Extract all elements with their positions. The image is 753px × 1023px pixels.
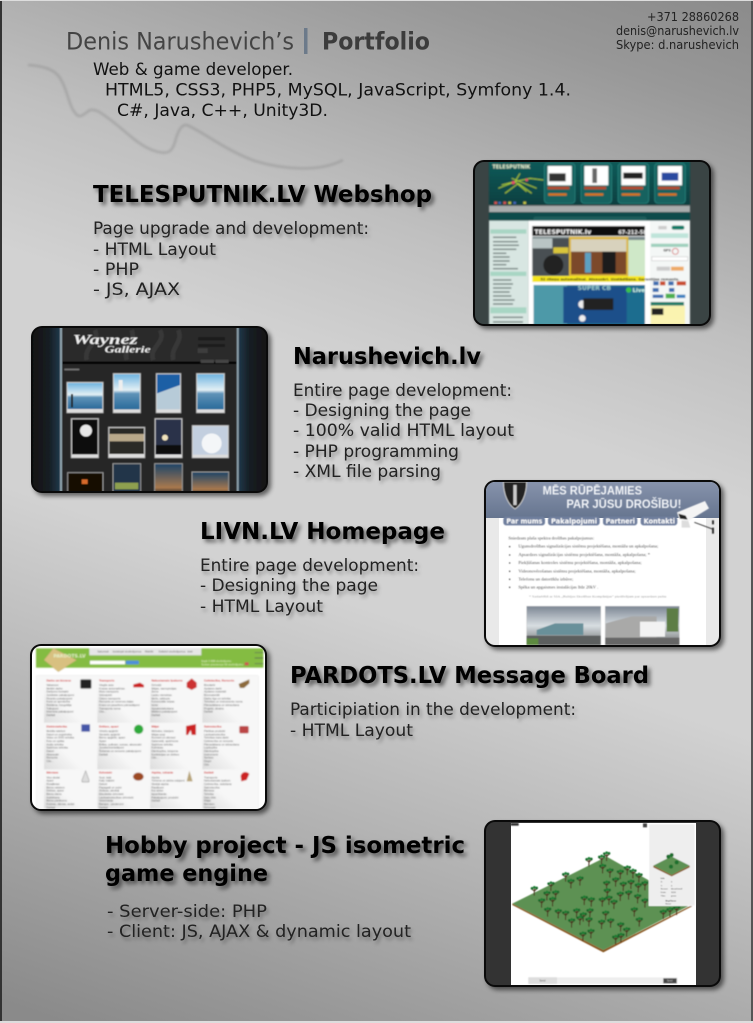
screenshot: Pardots message board: Visu skolai	[46, 775, 60, 779]
game info panel: Tiles:	[661, 895, 666, 897]
game info panel: Y:	[661, 885, 663, 887]
game info panel: 0	[671, 885, 673, 887]
game info panel: Reset	[665, 903, 671, 906]
screenshot: Telesputnik webshop: 67-212-583	[618, 230, 651, 236]
screenshot: Pardots message board: Elektrotehnika	[46, 724, 67, 728]
screenshot: Pardots message board: Apsaimniekošana	[151, 706, 174, 710]
screenshot: Pardots message board: Drēbes, apavi	[46, 789, 64, 793]
screenshot: Pardots message board: Brilles, pulkstei, somas, aksesuāri	[99, 742, 142, 746]
screenshot: Pardots message board	[30, 644, 270, 814]
trees	[531, 851, 680, 944]
screenshot: Pardots message board: Rozsieti un dārzeņi	[151, 736, 176, 740]
game info panel: Screen:	[661, 888, 668, 891]
screenshot: Pardots message board: Dzīvnieki	[204, 805, 216, 809]
screenshot: Pardots message board: Cits...	[151, 756, 159, 760]
icon: security camera	[677, 501, 714, 534]
intro text: Web & game developer.	[93, 60, 293, 80]
page title	[66, 28, 430, 56]
screenshot: Pardots message board: Rotaļlietas	[46, 782, 60, 786]
screenshot: Pardots message board: Finanšu pakalpojumi	[46, 696, 73, 700]
screenshot: Pardots message board: Dārzkopība	[204, 749, 219, 753]
screenshot: Pardots message board: Tehnikas un instrumentu noma	[204, 700, 243, 704]
screenshot: Pardots message board: Juridiskie pakalpojumi	[46, 693, 74, 697]
screenshot: Pardots message board: Mākleru pakalpojumi	[151, 710, 178, 714]
game info panel: grass	[671, 894, 676, 897]
intro text	[93, 60, 571, 121]
screenshot: Pardots message board: Šūšanas un remontu pakalpojumi	[99, 748, 141, 753]
screenshot: Pardots message board: Dažādi	[99, 752, 108, 756]
screenshot: Pardots message board: Mēbeles, interjers	[151, 729, 174, 733]
screenshot: Pardots message board: Šodien pievienoja 58 sludinājumu	[201, 661, 244, 666]
contact details: +371 28860268	[647, 9, 739, 24]
screenshot: Pardots message board: Transporta noma	[99, 706, 121, 710]
game info panel: X:	[661, 882, 663, 884]
screenshot: Pardots message board: Kaķi, kaķēni	[99, 779, 115, 783]
screenshot: Pardots message board: Sieviešu apģērbi	[99, 731, 120, 736]
decorative swoosh	[28, 65, 343, 168]
screenshot: Pardots message board: Kur aiziet	[151, 789, 163, 793]
screenshot: Pardots message board: Mājas, savrupmājas	[151, 686, 177, 690]
project text: Telesputnik: Page upgrade and development:	[93, 219, 369, 239]
game info panel: Info	[661, 878, 665, 880]
screenshot: Livn homepage: Telefonu un datortīklu izbūve;	[518, 577, 573, 581]
contact details	[616, 9, 740, 52]
screenshot: Pardots message board: Projekti, dizains	[204, 706, 224, 710]
screenshot: Waynez Gallerie: Gallerie	[105, 346, 151, 356]
screenshot: Pardots message board: Kravas automašīnas	[99, 686, 125, 690]
project text: Narushevich: Entire page development:	[293, 381, 512, 401]
project text: Narushevich: - Designing the page	[293, 401, 471, 421]
screenshot: Pardots message board: Tehnika	[204, 792, 214, 796]
screenshot: Pardots message board: Bērnu apģērbi, apavi	[99, 735, 125, 740]
screenshot: Pardots message board: Celtniecība, radošana	[204, 782, 232, 786]
game info panel: 1024	[671, 892, 677, 894]
screenshot: Pardots message board: Pakalpojumi, produkti	[151, 795, 179, 799]
screenshot: Pardots message board: Barojos - piederumi	[99, 802, 124, 806]
screenshot: Pardots message board: Sakumsā	[97, 650, 109, 654]
screenshot: Pardots message board: Kursi un apmācība	[46, 700, 70, 704]
screenshot: Pardots message board: Vietējā atpūta	[151, 782, 169, 786]
screenshot: Pardots message board: Darbs un biznese	[46, 678, 71, 682]
bottom command bar: Send	[667, 981, 673, 983]
screenshot: Pardots message board: Nekustamais īpašum	[204, 779, 231, 783]
screenshot: Pardots message board: Dažādi	[204, 710, 213, 714]
screenshot: Pardots message board: Tūrisma un atūtra ceļojumi	[151, 779, 185, 783]
screenshot: Pardots message board: Dārzkopība, lolojuma	[151, 749, 178, 753]
game info panel: 0	[671, 882, 673, 884]
screenshot: Pardots message board: Tehnikas kara darbi	[204, 736, 229, 740]
screenshot: Pardots message board: Konfekcijas un drēbes	[151, 752, 180, 756]
screenshot: Pardots message board: Lopkopība	[204, 746, 218, 750]
project text: Narushevich: - 100% valid HTML layout	[293, 421, 514, 441]
screenshot: Pardots message board: Degvi	[204, 759, 212, 763]
screenshot: Pardots message board: Auklēšana	[46, 795, 60, 799]
intro text: HTML5, CSS3, PHP5, MySQL, JavaScript, Symfony 1.4.	[105, 80, 571, 100]
screenshot: Pardots message board: Meklēt	[145, 650, 153, 654]
project text: hobby engine: - Client: JS, AJAX & dynamic layout	[107, 922, 411, 942]
screenshot: Pardots message board: Lauksaimniecības dzīvnieki	[99, 795, 134, 799]
screenshot: Pardots message board: Gaismekļi, apdzīvone	[151, 739, 179, 743]
screenshot: Pardots message board: Celtniecība, Remonts	[204, 678, 235, 682]
screenshot: Pardots message board: Datori un orgtehnika	[46, 732, 72, 736]
screenshot: Telesputnik webshop: 52 riteņu automašīnai. Atsauzāri. Uzstādīšana. Garantijas remonts.	[540, 278, 680, 282]
screenshot: Pardots message board: Atpūta	[151, 775, 160, 779]
project text: Telesputnik	[93, 182, 432, 300]
screenshot: Livn homepage: Kontakti	[644, 517, 675, 525]
project text: hobby engine: - Server-side: PHP	[107, 902, 267, 922]
screenshot: Pardots message board: Dažādi	[46, 805, 56, 809]
project text: Livn: Entire page development:	[200, 556, 419, 576]
intro text: C#, Java, C++, Unity3D.	[117, 101, 328, 121]
screenshot: Pardots message board: Darbs līgu un tehnika	[204, 696, 231, 700]
screenshot: Pardots message board: Izvietojet sludinājumus	[113, 650, 142, 654]
game info panel: Map/Game	[665, 900, 677, 902]
screenshot: Pardots message board: Sadzīves tehnika	[46, 746, 68, 750]
screenshot: Pardots message board: Dažādi	[99, 805, 108, 809]
page title: Portfolio	[322, 28, 430, 56]
screenshot: Pardots message board: Kravu un pasažieru pārvadājumi	[99, 703, 140, 707]
screenshot: Pardots message board: Cits	[204, 762, 209, 766]
screenshot: Pardots message board: Dažādi	[46, 713, 56, 717]
screenshot: Pardots message board: Biznesa	[204, 789, 214, 793]
game info panel	[649, 824, 695, 906]
project text: hobby engine: Hobby project - JS isometric	[105, 833, 465, 859]
screenshot: Pardots message board: Reklāma, fotogrāfija	[46, 703, 72, 707]
screenshot: Telesputnik webshop: TELESPUTNIK.lv	[534, 229, 592, 236]
screenshot: Livn homepage: Videonovērošanas sistēmu projektēšana, montāža, apkalpošana;	[518, 569, 636, 574]
screenshot: Pardots message board: Aksesuāri	[46, 752, 59, 756]
isometric ground	[512, 857, 693, 952]
screenshot: Pardots message board: Mobilie telefoni	[46, 729, 66, 733]
screenshot: Pardots message board: Lauku viensētas	[151, 693, 172, 697]
screenshot: Livn homepage: * Sadarbībā ar SIA „Baltijas Drošības Kompānijas” piedāvājam par apsardzes pultu	[529, 595, 667, 600]
screenshot: Pardots message board: Datori	[46, 749, 54, 753]
screenshot: Pardots message board: Iepazīšanās	[151, 792, 167, 796]
screenshot: Pardots message board: Mežs, sēklopis	[151, 696, 170, 700]
screenshot: Pardots message board: Pārvadāšana un iekraušana	[204, 703, 240, 707]
project text: Telesputnik: - HTML Layout	[93, 240, 216, 260]
screenshot: Waynez Gallerie	[31, 326, 271, 496]
screenshot: Livn homepage: Apsardzes signalizācijas sistēmu projektēšana, montāža, apkalpošana; *	[518, 553, 650, 558]
screenshot: Pardots message board: Datu tīkls	[204, 795, 216, 799]
screenshot: Pardots message board: Vieglie auto	[99, 683, 114, 687]
screenshot: Pardots message board: Mājai	[204, 799, 211, 803]
screenshot: Pardots message board: Foto un optika	[46, 739, 65, 743]
screenshot: Pardots message board: Mājai	[151, 724, 159, 728]
project text: Narushevich	[293, 344, 514, 482]
project text: Telesputnik: TELESPUTNIK.LV Webshop	[93, 182, 432, 208]
screenshot: Pardots message board: Būvmateriāli	[204, 693, 220, 697]
screenshot: Livn homepage: Pakalpojumi	[551, 517, 597, 525]
screenshot: Pardots message board: Zeme	[151, 690, 159, 694]
screenshot: Livn homepage: Ugunsdrošības signalizācijas sistēmu projektēšana, montāža un apkalpošana;	[518, 545, 658, 550]
game info panel: Units:	[661, 891, 667, 894]
screenshot: Pardots message board: Instrumenti	[204, 752, 218, 756]
screenshot: Pardots message board: Dzēstot sludinājumus	[159, 650, 186, 654]
screenshot: Pardots message board: Drēbes, apavi	[99, 724, 119, 728]
screenshot: Pardots message board: Remonts un rezerves daļas	[99, 700, 134, 704]
screenshot: Pardots message board: Saimniecība	[204, 724, 222, 728]
screenshot: Pardots message board: Pasākumi	[151, 785, 164, 789]
screenshot: Pardots message board: Dzīvokļi	[151, 683, 162, 687]
screenshot: Pardots message board: Pārtikas produkti	[204, 729, 225, 733]
screenshot: Pardots message board: Darījumu kontakti	[46, 690, 69, 694]
screenshot: Pardots message board: Būvdarbi	[204, 683, 216, 687]
screenshot: Telesputnik webshop: GPS	[663, 249, 672, 253]
screenshot: Pardots message board: Serises	[204, 756, 214, 760]
screenshot: Pardots message board: Saimniecība	[204, 785, 220, 789]
screenshot: Pardots message board: Komerciālie telpas	[151, 700, 175, 704]
screenshot: Telesputnik webshop: Live	[633, 288, 645, 294]
screenshot: Pardots message board: Apavi	[99, 739, 106, 743]
screenshot: Pardots message board: Bērnu dārzs	[46, 792, 62, 796]
screenshot: Pardots message board: Vīriešu apģērbi	[99, 728, 118, 733]
screenshot: Pardots message board: Dažādi	[151, 799, 161, 803]
screenshot: Livn homepage	[484, 480, 724, 650]
project text: Livn: - HTML Layout	[200, 597, 323, 617]
screenshot: Telesputnik webshop	[473, 160, 714, 329]
screenshot: Livn homepage: Piekļūšanas kontroles sistēmu projektēšana, montāža, apkalpošana;	[518, 561, 642, 566]
screenshot: Pardots message board: Juvelierizstrādājumi	[99, 746, 124, 750]
screenshot: Pardots message board: Zivtiņas, akvāriji	[99, 789, 119, 793]
game info panel: tileset/small	[671, 888, 683, 891]
screenshot: Pardots message board: Tulkojumi	[46, 706, 59, 710]
project text: hobby engine	[105, 833, 465, 942]
project text: Pardots	[290, 663, 649, 741]
screenshot: Pardots message board: Nekustamais īpašums	[151, 678, 183, 682]
screenshot: Pardots message board: Ūdens transports	[99, 695, 121, 700]
screenshot: Livn homepage: PAR JŪSU DROŠĪBU!	[566, 496, 681, 511]
page title: Denis Narushevich’s	[66, 28, 294, 56]
screenshot: Pardots message board: Transports	[204, 775, 218, 779]
screenshot: isometric game engine	[484, 820, 724, 990]
screenshot: Pardots message board: Vakances	[46, 683, 59, 687]
screenshot: Pardots message board: Cits...	[46, 759, 54, 763]
project text: Pardots: Participiation in the development:	[290, 700, 576, 720]
screenshot: Pardots message board: Dzīvnieki	[99, 771, 112, 775]
project text: Livn	[200, 519, 445, 617]
screenshot: Pardots message board: Eksotiskie dzīvnieki	[99, 792, 124, 796]
project text: Narushevich: Narushevich.lv	[293, 344, 481, 370]
screenshot: Pardots message board: Transports	[99, 678, 115, 682]
screenshot: Pardots message board: Suņi, kaķi	[99, 775, 112, 779]
screenshot: Pardots message board: Atpūta, izklaide	[151, 771, 174, 775]
screenshot: Livn homepage: Partneri	[606, 517, 635, 525]
screenshot: Pardots message board: Bērnu ratiņiem	[46, 785, 65, 789]
project text: Pardots: PARDOTS.LV Message Board	[290, 663, 649, 689]
screenshot: Pardots message board: Futūras, dārzas, autiņi	[46, 802, 75, 806]
screenshot: Pardots message board: Mājas auqi	[151, 732, 165, 736]
screenshot: Pardots message board: Kuhniņas	[151, 746, 164, 750]
project text: Livn: - Designing the page	[200, 576, 378, 596]
screenshot: Telesputnik webshop: SUPER CB	[578, 285, 611, 292]
screenshot: Pardots message board: Dekoti	[99, 782, 107, 786]
screenshot: Pardots message board: Iziet	[187, 650, 193, 654]
screenshot: Pardots message board: Sadzīves tehnika	[151, 742, 173, 746]
contact details: Skype: d.narushevich	[616, 37, 739, 52]
screenshot: Pardots message board: Meklēt darbu	[46, 686, 63, 690]
screenshot: Pardots message board: Dažādi	[151, 713, 161, 717]
screenshot: Pardots message board: Apavi	[46, 779, 54, 783]
screenshot: Pardots message board: Lauksaimniecība	[204, 732, 226, 736]
screenshot: Pardots message board: Video un DVD tehnika	[46, 736, 75, 740]
project text: Telesputnik: - PHP	[93, 260, 139, 280]
screenshot: Pardots message board: PARDOTS.LV	[53, 653, 86, 659]
screenshot: Pardots message board: Istrisi	[151, 703, 158, 707]
screenshot: Pardots message board: Velosipēdi	[99, 693, 112, 697]
screenshot: Pardots message board: Celtniecība un remonts	[204, 739, 234, 743]
project text: Narushevich: - PHP programming	[293, 442, 459, 462]
bottom command bar	[528, 977, 678, 984]
screenshot: Livn homepage: Spēka un apgaismes instalācijas līdz 20kV .	[518, 585, 598, 589]
screenshot: Livn homepage: MĒS RŪPĒJAMIES	[543, 483, 642, 497]
project text: Pardots: - HTML Layout	[290, 721, 413, 741]
screenshot: Pardots message board: Interneta pakalpojumi	[46, 710, 74, 714]
screenshot: Waynez Gallerie: Waynez	[73, 333, 138, 348]
screenshot: Livn homepage: Par mums	[506, 517, 542, 525]
bottom command bar: Send	[539, 979, 546, 983]
screenshot: Telesputnik webshop: TELESPUTNIK	[492, 164, 531, 170]
screenshot: Pardots message board: Apdares darbi	[204, 686, 222, 690]
screenshot: Pardots message board: Veterinārija	[99, 799, 114, 803]
screenshot: Pardots message board: Apdares materiāli	[204, 690, 226, 694]
project text: Livn: LIVN.LV Homepage	[200, 519, 445, 545]
screenshot: Pardots message board: Pārvadāšana un iekraušana	[204, 742, 240, 746]
screenshot: Pardots message board: Cits...	[99, 710, 106, 714]
screenshot: Pardots message board: Bērniem	[46, 771, 59, 775]
screenshot: Pardots message board: Moto transports	[99, 690, 119, 694]
project text: Telesputnik: - JS, AJAX	[93, 280, 180, 300]
project text: Narushevich: - XML file parsing	[293, 462, 441, 482]
screenshot: Pardots message board: Bērniem	[204, 802, 215, 806]
project text: hobby engine: game engine	[105, 861, 268, 887]
screenshot: Pardots message board: Kopā 3 888 sludinājumu	[201, 659, 232, 663]
screenshot: Pardots message board: Dažādi	[204, 771, 214, 775]
screenshot: Pardots message board: Remonts	[46, 756, 58, 760]
contact details: denis@narushevich.lv	[616, 23, 740, 38]
screenshot: Livn homepage: Sniedzam plaša spektra drošības pakalpojumus:	[508, 537, 594, 541]
screenshot: Pardots message board: Bērnu pārtikums	[46, 799, 68, 803]
screenshot: Pardots message board: Audio tehnika	[46, 742, 64, 746]
screenshot: Pardots message board: Papagaiļi un putni	[99, 785, 122, 789]
